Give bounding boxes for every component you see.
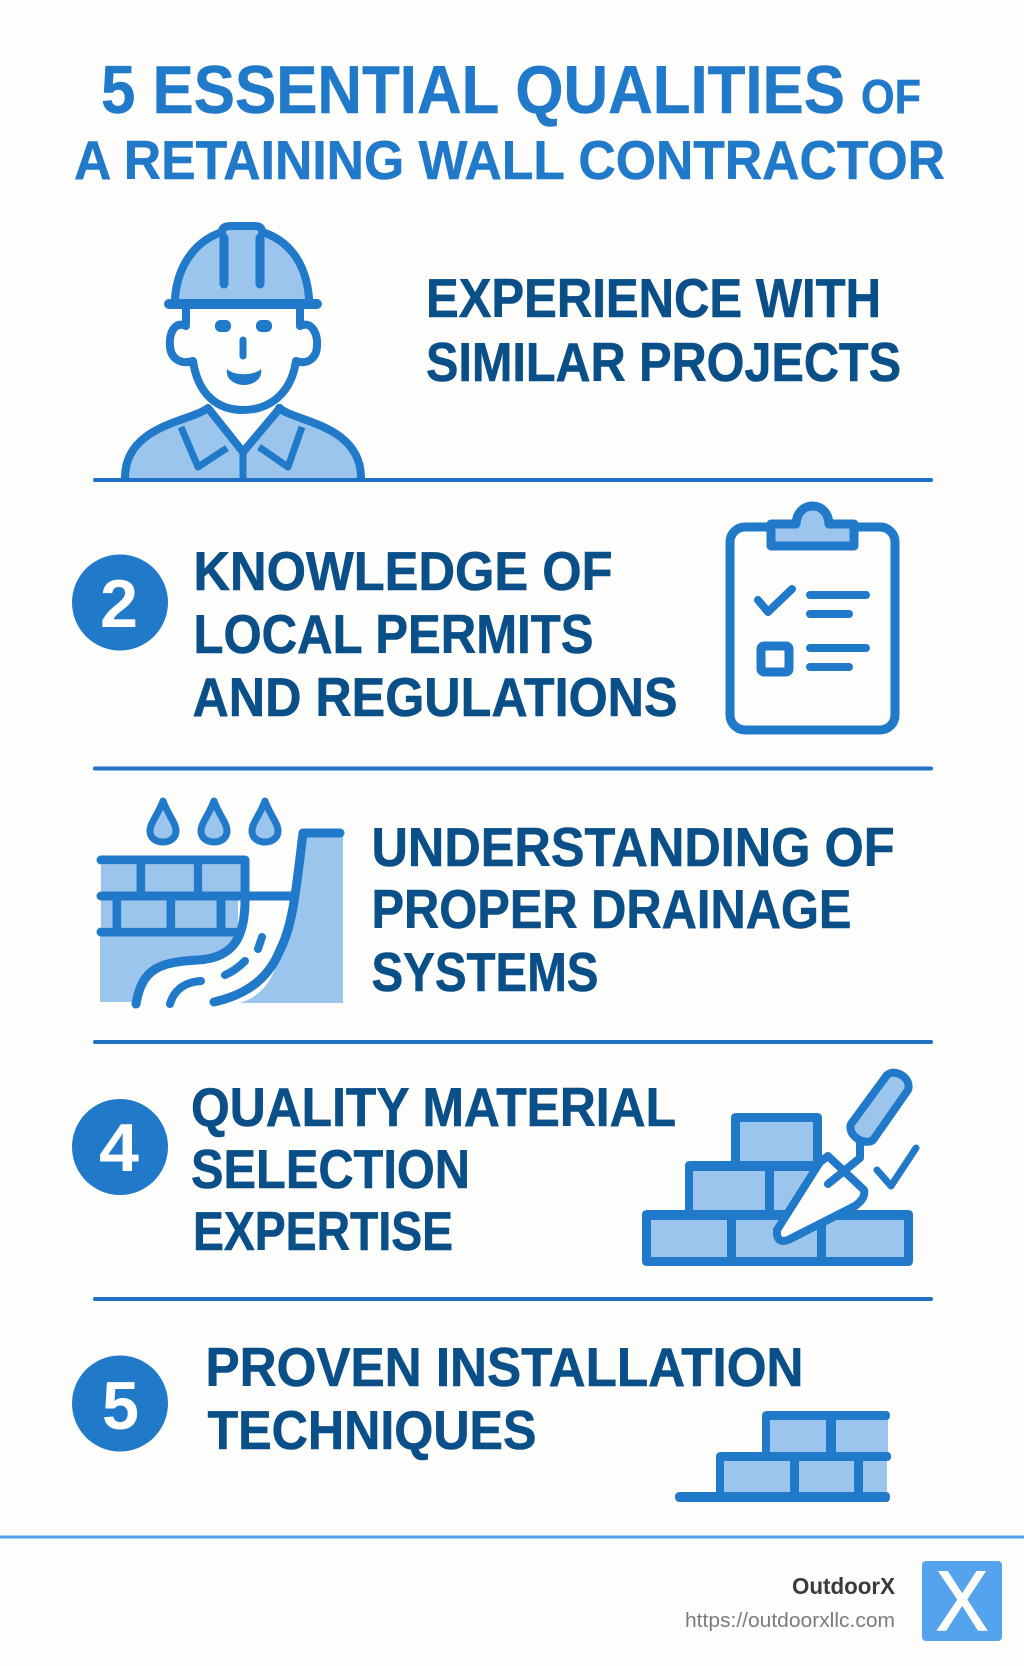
footer brand text — [685, 1573, 896, 1632]
text: permits: KNOWLEDGE OF — [194, 540, 612, 602]
text: materials: EXPERTISE — [193, 1200, 453, 1262]
text: installation: PROVEN INSTALLATION — [206, 1336, 804, 1398]
text: experience: EXPERIENCE WITH — [426, 267, 881, 329]
number badge 5: 5 — [102, 1368, 139, 1444]
text: materials — [191, 1076, 676, 1262]
text: materials: SELECTION — [191, 1138, 470, 1200]
footer brand text: https://outdoorxllc.com — [685, 1610, 895, 1632]
title — [74, 52, 945, 191]
text: permits — [192, 540, 678, 728]
text: installation: TECHNIQUES — [208, 1399, 536, 1461]
footer brand text: OutdoorX — [792, 1573, 896, 1599]
title: 5 ESSENTIAL QUALITIES — [101, 52, 845, 128]
number badge 5 — [72, 1356, 168, 1452]
text: installation — [206, 1336, 804, 1461]
icon: drainage — [100, 801, 343, 1004]
icon: small brick wall — [675, 1411, 891, 1502]
number badge 4: 4 — [99, 1110, 139, 1186]
text: permits: LOCAL PERMITS — [194, 603, 594, 665]
text: materials: QUALITY MATERIAL — [191, 1076, 676, 1138]
text: experience — [426, 267, 901, 393]
text: permits: AND REGULATIONS — [192, 666, 678, 728]
text: experience: SIMILAR PROJECTS — [426, 331, 901, 393]
number badge 2: 2 — [100, 566, 138, 642]
icon: bricks and trowel — [642, 1073, 916, 1266]
number badge 2 — [72, 554, 168, 650]
text: drainage: UNDERSTANDING OF — [372, 816, 894, 878]
footer rule — [0, 1536, 1024, 1538]
title: A RETAINING WALL CONTRACTOR — [74, 129, 945, 191]
number badge 4 — [72, 1099, 168, 1195]
icon: clipboard — [730, 506, 895, 730]
text: drainage — [372, 816, 894, 1003]
logo: X — [936, 1554, 988, 1648]
title: OF — [861, 71, 921, 124]
text: drainage: PROPER DRAINAGE — [372, 878, 852, 940]
icon: construction worker — [125, 226, 362, 478]
text: drainage: SYSTEMS — [372, 941, 598, 1003]
